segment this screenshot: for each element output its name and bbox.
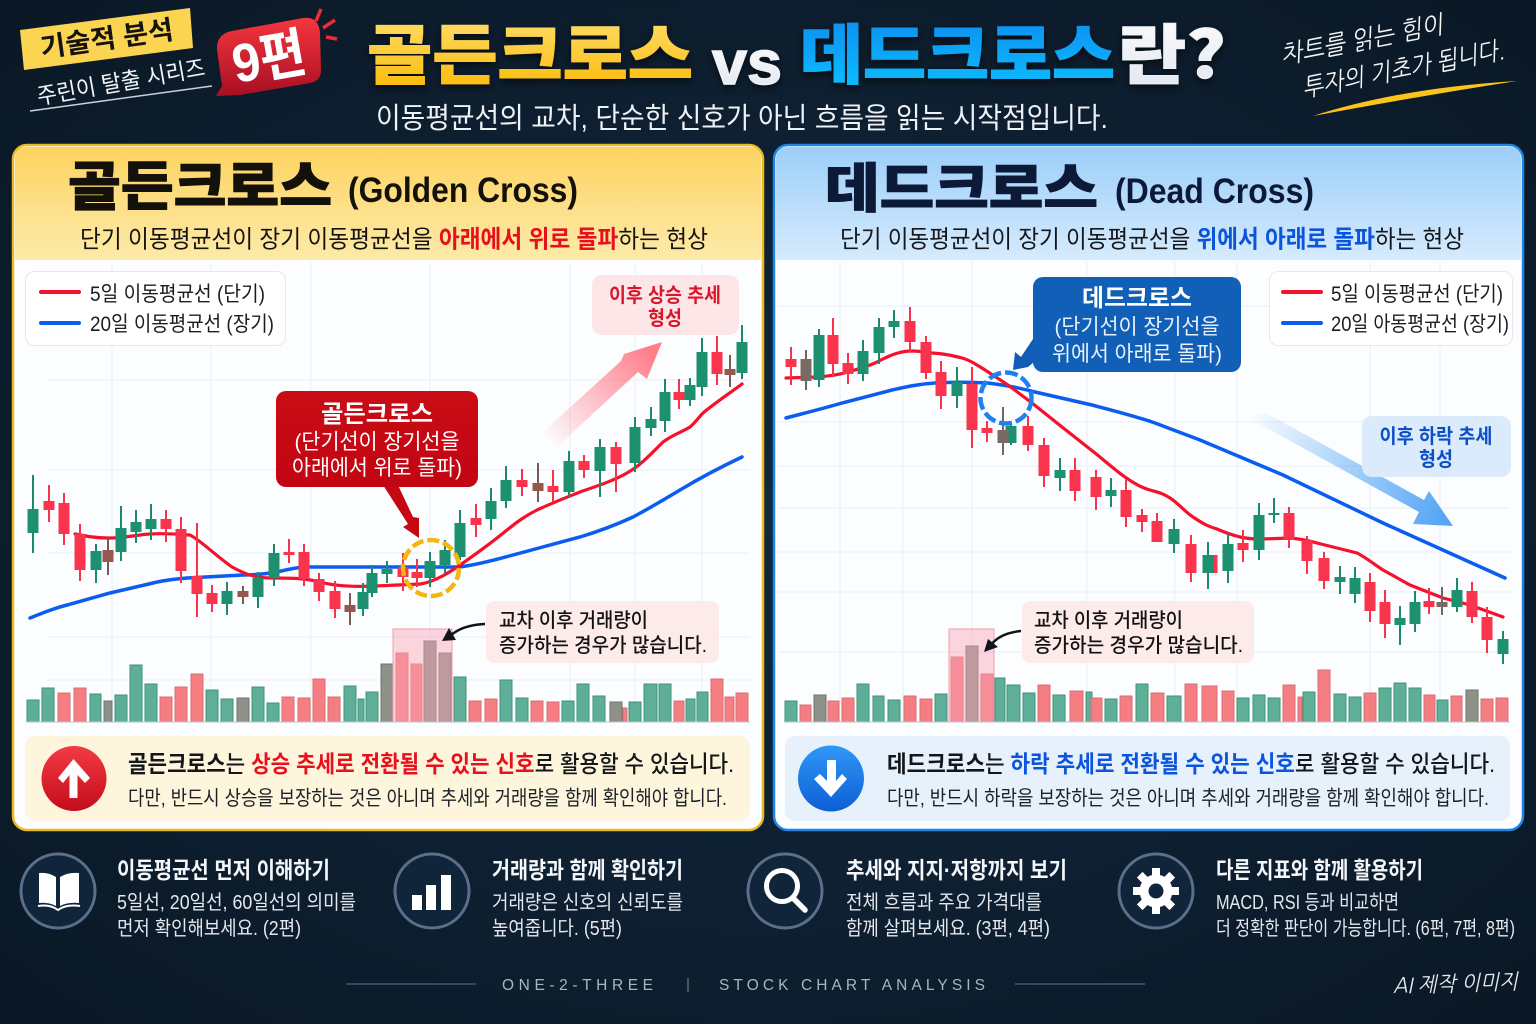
moving average 5 (786, 351, 1503, 617)
label: downtrend: 형성 (1419, 448, 1453, 471)
label: downtrend (1362, 416, 1511, 477)
tip: volume: 높여줍니다. (5편) (492, 917, 622, 940)
legend: 5일 이동평균선 (단기) (1331, 283, 1503, 306)
callout: dead cross (1033, 277, 1241, 372)
callout: golden cross: 골든크로스 (321, 401, 433, 428)
tip: volume: 거래량은 신호의 신뢰도를 (492, 891, 683, 914)
main title: 골든크로스 (367, 3, 693, 97)
volume note: 증가하는 경우가 많습니다. (1034, 634, 1243, 657)
callout: dead cross: 위에서 아래로 돌파) (1052, 342, 1222, 366)
legend: 20일 아동평균선 (장기) (1331, 313, 1509, 336)
handwritten note: 차트를 읽는 힘이 (1278, 11, 1447, 68)
tip: moving averages (21, 854, 356, 940)
episode badge (216, 9, 337, 96)
subtitle: 이동평균선의 교차, 단순한 신호가 아닌 흐름을 읽는 시작점입니다. (376, 102, 1108, 135)
volume highlight (949, 629, 994, 722)
tip: other indicators: 다른 지표와 함께 활용하기 (1216, 857, 1423, 883)
episode badge: 9편 (228, 23, 311, 95)
panel header: golden cross (15, 145, 761, 260)
callout pointer: blue arrow (1013, 339, 1040, 370)
volume note: 교차 이후 거래량이 (499, 609, 648, 632)
tip: trend and support: 함께 살펴보세요. (3편, 4편) (846, 917, 1050, 940)
legend (26, 272, 286, 346)
moving average 20 (786, 382, 1505, 578)
callout: golden cross (276, 391, 478, 487)
icon: gear (1119, 854, 1193, 928)
label: downtrend: 이후 하락 추세 (1380, 425, 1492, 448)
candlesticks (28, 325, 748, 625)
volume note: 교차 이후 거래량이 (1034, 609, 1183, 632)
moving average 20 (30, 457, 742, 618)
tip: volume (395, 854, 683, 940)
main title: vs (712, 29, 782, 98)
footer: ONE-2-THREE (502, 977, 653, 994)
takeaway box: golden: 다만, 반드시 상승을 보장하는 것은 아니며 추세와 거래량을 함께 확인해야 합니다. (128, 787, 727, 810)
trend arrow: down (1247, 413, 1453, 526)
chart: dead cross (778, 262, 1512, 722)
heading english: (Golden Cross) (348, 171, 578, 210)
callout: golden cross: 아래에서 위로 돌파) (292, 456, 462, 480)
label: uptrend (592, 275, 739, 335)
main title: 데드크로스 (800, 3, 1115, 97)
moving average 5 (75, 384, 742, 586)
footer (346, 977, 1145, 994)
volume bars (27, 641, 748, 722)
trend arrow: up (543, 342, 662, 447)
heading: 데드크로스 (825, 147, 1098, 223)
tip: other indicators (1119, 854, 1515, 940)
volume bars (785, 646, 1508, 722)
AI credit: AI 제작 이미지 (1392, 971, 1520, 997)
label: uptrend: 형성 (648, 307, 682, 330)
icon: down arrow (798, 746, 864, 812)
icon: book (21, 854, 95, 928)
tag: technical analysis (20, 8, 193, 70)
volume highlight (393, 629, 452, 722)
takeaway box: golden (25, 736, 750, 821)
callout: dead cross: 데드크로스 (1082, 285, 1192, 312)
tip: other indicators: MACD, RSI 등과 비교하면 (1216, 891, 1399, 914)
icon: up arrow (42, 746, 106, 811)
takeaway box: dead (785, 736, 1510, 821)
chart: golden cross (26, 262, 750, 722)
tip: trend and support (748, 854, 1067, 940)
main title: 란? (1118, 3, 1226, 97)
panel: dead cross (774, 145, 1523, 830)
heading english: (Dead Cross) (1115, 172, 1314, 211)
tip: moving averages: 먼저 확인해보세요. (2편) (117, 917, 301, 940)
volume note: 증가하는 경우가 많습니다. (499, 634, 707, 657)
callout pointer: red arrow (383, 483, 419, 538)
series subtitle: 주린이 탈출 시리즈 (35, 54, 207, 110)
takeaway box: golden: 골든크로스는 상승 추세로 전환될 수 있는 신호로 활용할 수 있습니다. (128, 751, 734, 777)
tip: moving averages: 5일선, 20일선, 60일선의 의미를 (117, 891, 356, 914)
handwritten note (1278, 11, 1517, 116)
tip: trend and support: 추세와 지지·저항까지 보기 (846, 857, 1067, 883)
legend: 20일 이동평균선 (장기) (90, 313, 274, 336)
panel header: dead cross (776, 147, 1521, 260)
main title (367, 3, 1226, 98)
definition: 단기 이동평균선이 장기 이동평균선을 아래에서 위로 돌파하는 현상 (80, 226, 708, 254)
series tag (20, 8, 212, 111)
callout: dead cross: (단기선이 장기선을 (1054, 315, 1220, 339)
volume note (442, 601, 719, 663)
takeaway box: dead: 데드크로스는 하락 추세로 전환될 수 있는 신호로 활용할 수 있습니다. (887, 751, 1495, 777)
tip: trend and support: 전체 흐름과 주요 가격대를 (846, 891, 1042, 914)
cross marker: blue dashed circle (980, 372, 1032, 424)
icon: magnifier (748, 854, 822, 928)
icon: bar chart (395, 854, 469, 928)
legend (1270, 272, 1512, 346)
heading: 골든크로스 (68, 145, 332, 221)
tag: technical analysis: 기술적 분석 (38, 15, 175, 63)
tip: moving averages: 이동평균선 먼저 이해하기 (117, 857, 330, 883)
panel: golden cross (13, 145, 763, 830)
tip: volume: 거래량과 함께 확인하기 (492, 857, 683, 883)
volume note (984, 601, 1254, 663)
footer: STOCK CHART ANALYSIS (719, 977, 985, 994)
candlesticks (786, 307, 1508, 664)
legend: 5일 이동평균선 (단기) (90, 283, 265, 306)
definition: 단기 이동평균선이 장기 이동평균선을 위에서 아래로 돌파하는 현상 (840, 226, 1464, 254)
label: uptrend: 이후 상승 추세 (609, 284, 721, 307)
callout: golden cross: (단기선이 장기선을 (294, 430, 460, 454)
cross marker: gold dashed circle (403, 540, 459, 596)
handwritten note: 투자의 기초가 됩니다. (1300, 37, 1506, 101)
